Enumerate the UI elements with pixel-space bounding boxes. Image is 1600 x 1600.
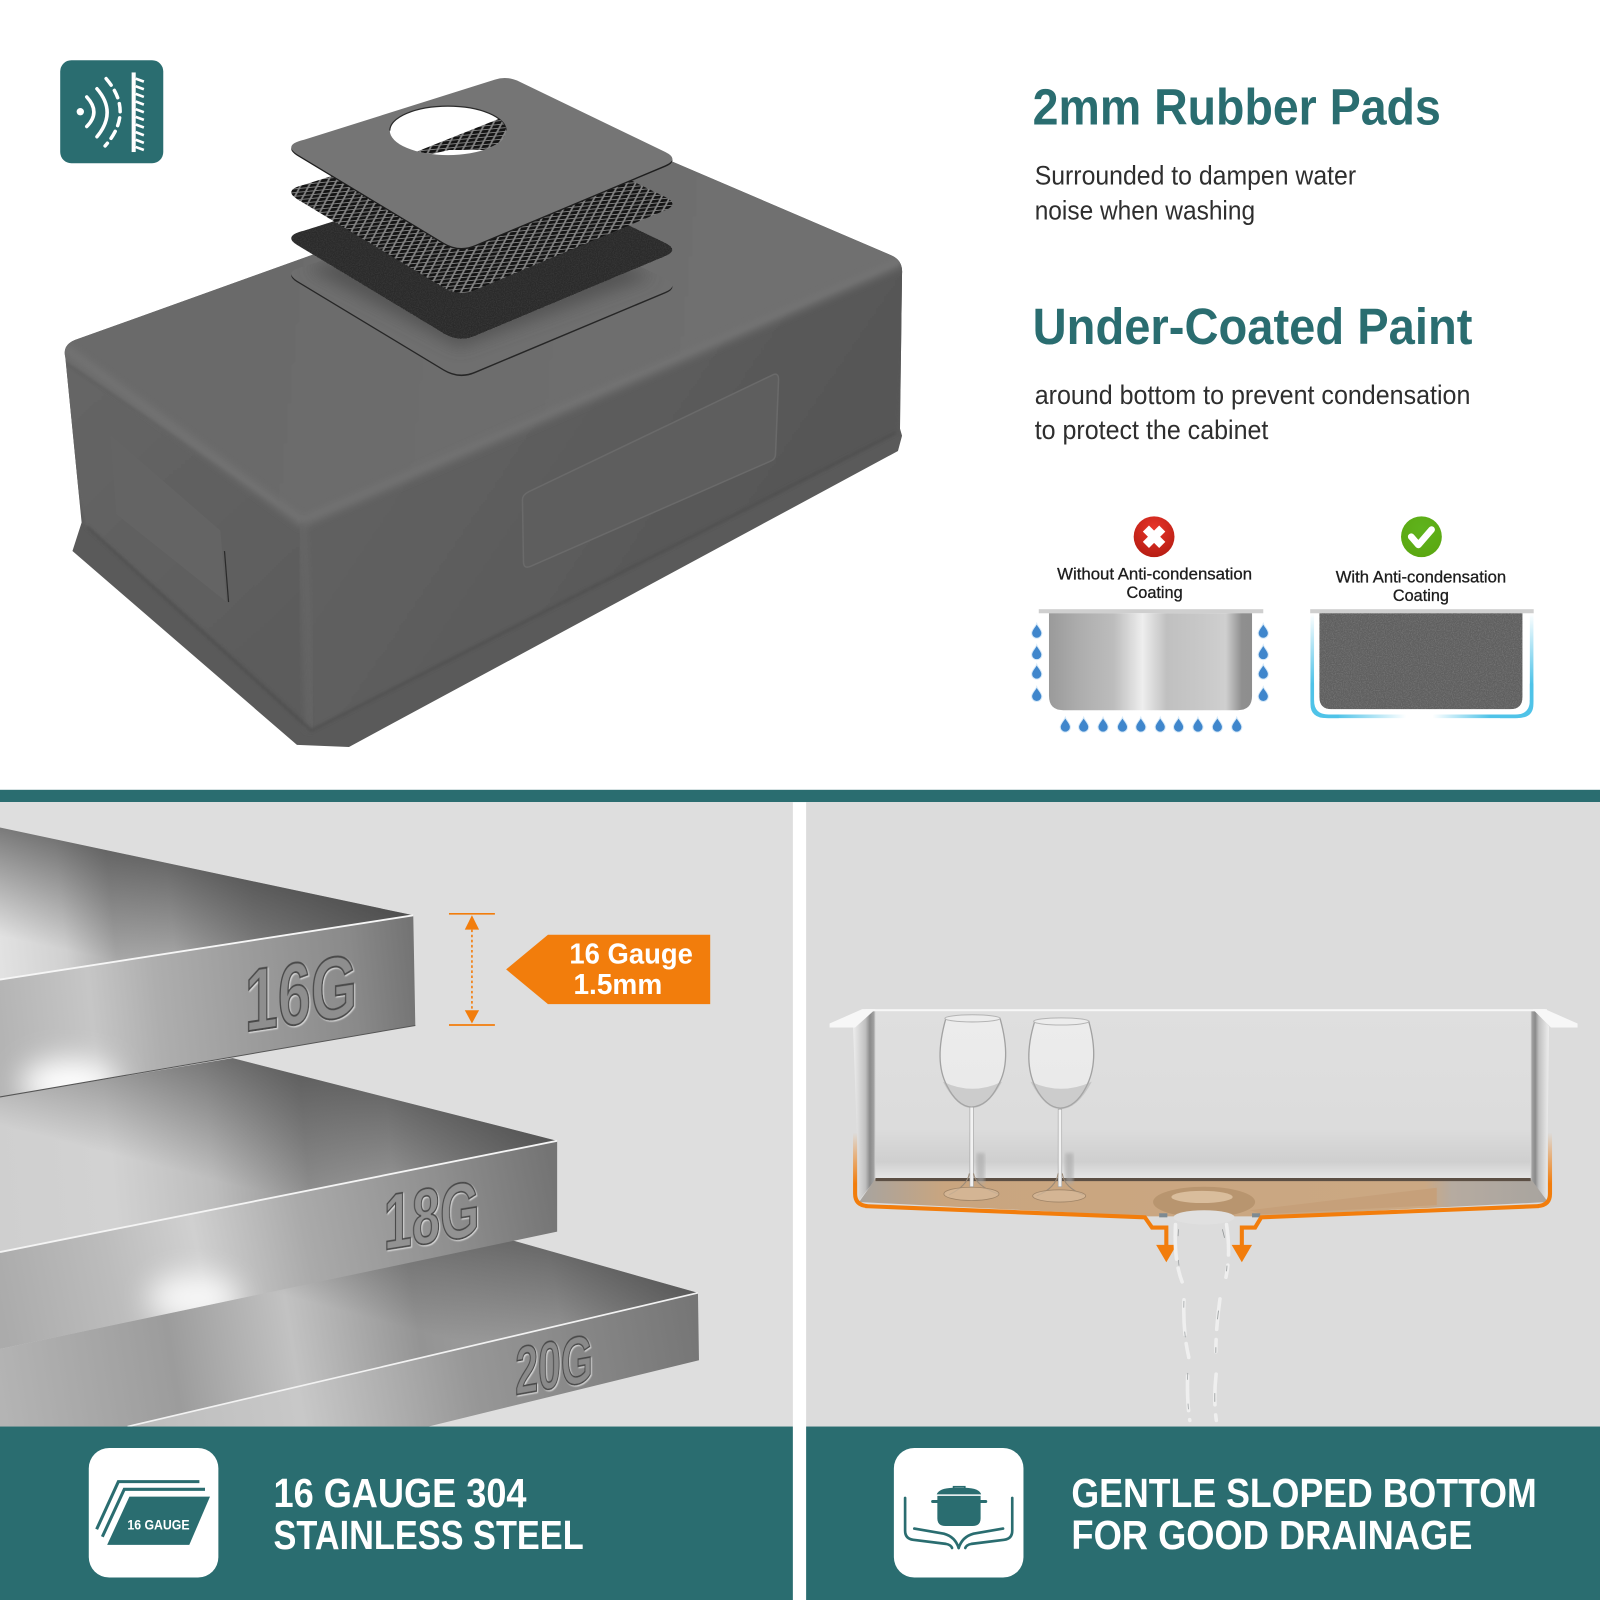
wine glass left	[940, 1015, 1006, 1201]
reinforcement panel: left side	[110, 435, 229, 602]
label: with coating: With Anti-condensation	[1336, 568, 1506, 587]
icon: sound dampening	[60, 60, 163, 163]
reinforcement panel: right side	[522, 374, 779, 567]
steel basin	[1039, 609, 1263, 710]
steel sheet: 20G	[0, 1240, 699, 1427]
text block: rubber pads description: Surrounded to dampen water	[1035, 161, 1356, 191]
text block: paint description: around bottom to prevent condensation	[1035, 380, 1470, 410]
footer: sloped bottom	[806, 1427, 1600, 1600]
condensation droplets	[1032, 623, 1268, 732]
icon: 16 gauge sheets	[89, 1448, 218, 1578]
black foam pad	[291, 169, 672, 339]
label: with coating: Coating	[1393, 586, 1449, 605]
drain arrows	[1156, 1245, 1252, 1262]
panel: steel gauge comparison	[0, 802, 793, 1427]
text block: rubber pads description: noise when washing	[1035, 195, 1255, 225]
coated basin	[1310, 609, 1534, 709]
steel sheet: 18G	[0, 1058, 557, 1349]
sink back wall	[876, 1011, 1531, 1179]
icon: 16 gauge sheets: 16 GAUGE	[127, 1517, 190, 1533]
text: gentle sloped bottom: GENTLE SLOPED BOTTOM	[1071, 1470, 1537, 1516]
heading: Under-Coated Paint: Under-Coated Paint	[1033, 298, 1472, 355]
callout: 16 gauge 1.5mm	[506, 935, 710, 1004]
sloped orange outline	[855, 1133, 1550, 1247]
comparison: with coating	[1306, 515, 1539, 724]
coating outline	[1312, 613, 1532, 716]
label: without coating: Without Anti-condensation	[1057, 565, 1252, 584]
panel: undercoated sink with rubber pads	[41, 78, 918, 755]
heading: 2mm Rubber Pads: 2mm Rubber Pads	[1033, 78, 1441, 135]
base rubber plate	[291, 262, 672, 376]
callout: 16 gauge 1.5mm: 16 Gauge	[569, 938, 693, 970]
text: 16 gauge 304 stainless steel	[273, 1470, 584, 1558]
text block: paint description: to protect the cabinet	[1035, 415, 1269, 445]
text block: rubber pads description	[1035, 161, 1356, 225]
text: gentle sloped bottom: FOR GOOD DRAINAGE	[1071, 1512, 1472, 1558]
stamp: 18G: 18G	[384, 1163, 480, 1267]
panel: sloped bottom cross-section	[806, 802, 1600, 1427]
comparison: without coating	[1031, 515, 1271, 735]
stamp: 20G: 20G	[515, 1322, 593, 1410]
top rubber plate with drain hole	[291, 78, 672, 250]
icon: green check	[1401, 516, 1442, 557]
text block: paint description	[1035, 380, 1470, 445]
stamp: 16G: 16G	[245, 935, 357, 1051]
text: 16 gauge 304 stainless steel: 16 GAUGE 304	[273, 1470, 527, 1516]
sink side walls	[853, 1011, 1549, 1200]
divider bar	[0, 790, 1600, 802]
label: without coating: Coating	[1127, 583, 1183, 602]
steel sheet: 16G	[0, 828, 415, 1108]
text: gentle sloped bottom	[1071, 1470, 1537, 1558]
label: with coating	[1336, 568, 1506, 605]
callout: 16 gauge 1.5mm: 1.5mm	[573, 969, 662, 1001]
thickness dimension arrow	[449, 914, 495, 1025]
rim flanges	[830, 1009, 1578, 1028]
icon: red cross	[1134, 516, 1174, 557]
label: without coating	[1057, 565, 1252, 602]
text: 16 gauge 304 stainless steel: STAINLESS STEEL	[273, 1512, 584, 1558]
sink floor with water	[859, 1179, 1548, 1224]
footer: 16 gauge steel	[0, 1427, 793, 1600]
wine glass right	[1029, 1018, 1094, 1202]
mesh pad	[291, 123, 672, 293]
icon: pot in sloped sink	[894, 1448, 1023, 1578]
falling water streams	[1175, 1224, 1229, 1420]
